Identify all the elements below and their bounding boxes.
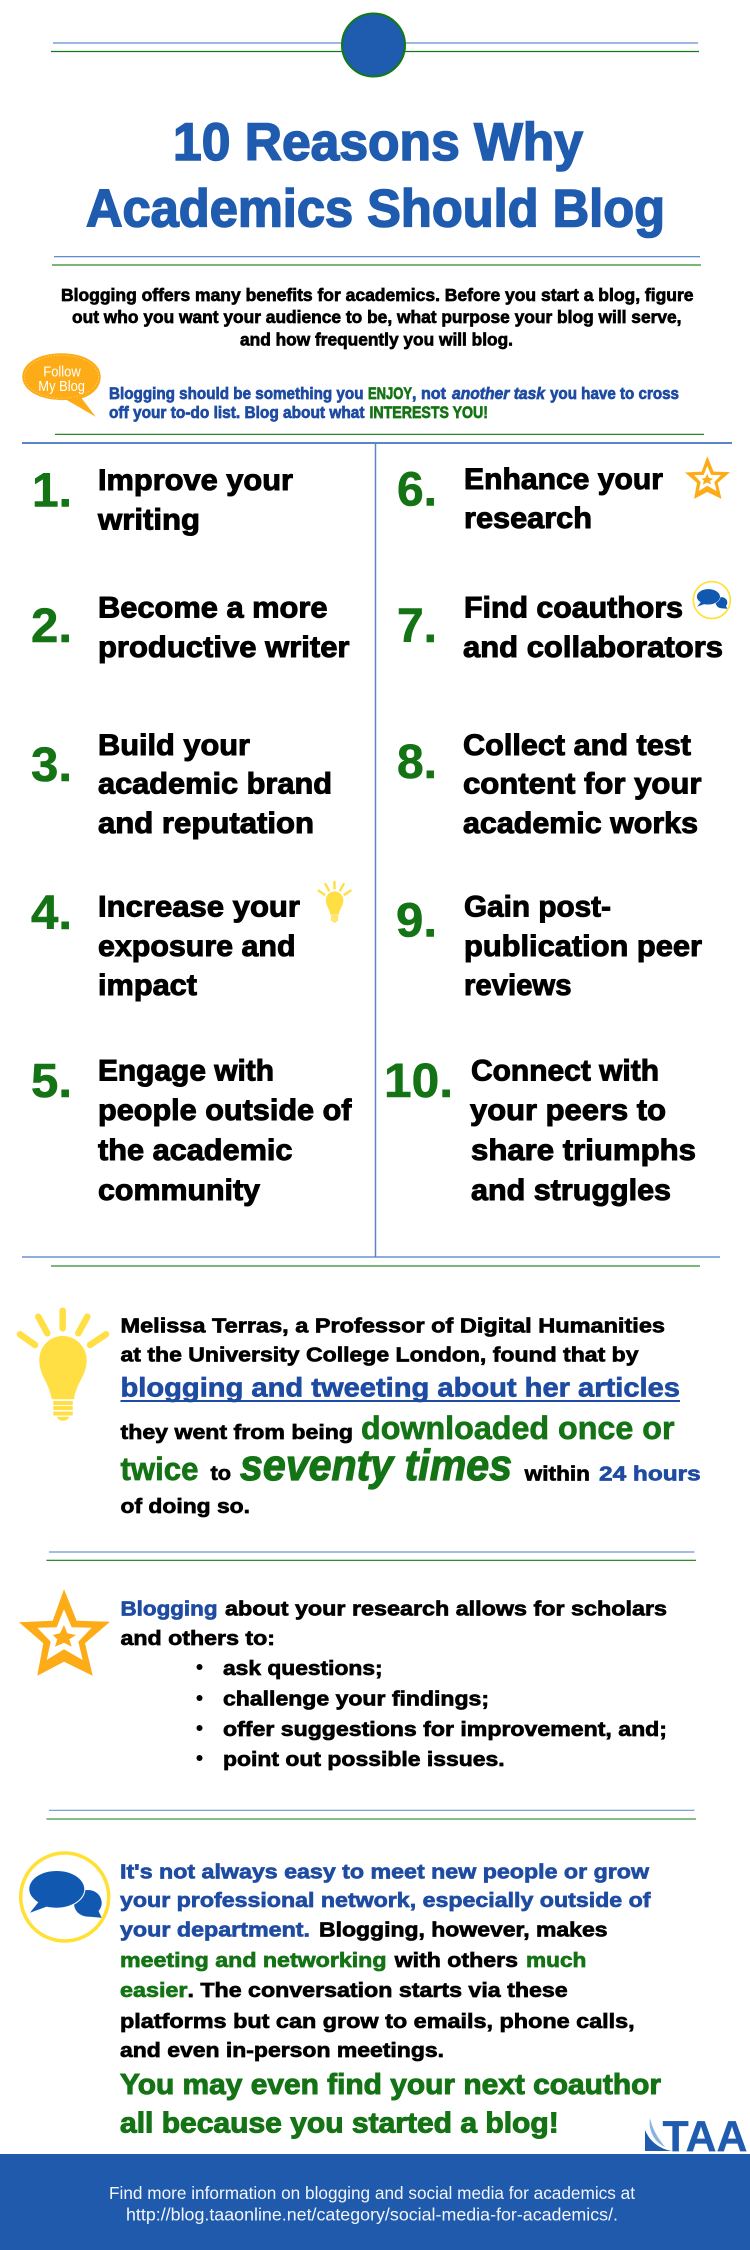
- top rule with circle ornament: [51, 14, 699, 76]
- icon: small light bulb: [319, 882, 351, 923]
- reason 5: the academic: [98, 1134, 292, 1167]
- icon: follow my blog speech bubble: My Blog: [38, 379, 85, 395]
- icon: large star: [19, 1589, 110, 1676]
- icon: small chat circle: [693, 582, 730, 619]
- reason 3: Build your: [98, 729, 250, 762]
- title: [86, 113, 665, 238]
- icon: follow my blog speech bubble: Follow: [43, 365, 81, 381]
- reason 1: 1.: [32, 465, 72, 518]
- reason 8: content for your: [463, 768, 702, 800]
- reason 1: Improve your: [98, 464, 293, 497]
- text block: blogging about research: Blogging: [120, 1598, 218, 1621]
- reason 10: share triumphs: [471, 1134, 696, 1167]
- icon: large chat circle: [21, 1853, 109, 1941]
- text block: Melissa Terras finding: to: [210, 1462, 231, 1485]
- reason 8: 8.: [397, 736, 437, 789]
- reason 9: Gain post-: [464, 891, 611, 924]
- reason 7: Find coauthors: [464, 592, 683, 625]
- reason 9: reviews: [464, 969, 572, 1002]
- callout: enjoy blogging: ENJOY: [368, 385, 412, 403]
- reason 10: and struggles: [471, 1174, 671, 1207]
- intro paragraph: out who you want your audience to be, what purpose your blog will serve,: [72, 307, 682, 327]
- text block: Melissa Terras finding: they went from being: [120, 1421, 353, 1444]
- text block: networking: your professional network, especially outside of: [120, 1889, 651, 1912]
- reason 5: community: [98, 1174, 260, 1207]
- icon: large light bulb: [20, 1311, 106, 1421]
- intro paragraph: Blogging offers many benefits for academics. Before you start a blog, figure: [61, 285, 694, 305]
- reason 6: Enhance your: [464, 463, 663, 496]
- reason 2: [31, 592, 350, 664]
- text block: networking: and even in-person meetings.: [120, 2039, 444, 2062]
- reason 5: people outside of: [98, 1094, 353, 1127]
- reason 1: writing: [97, 503, 200, 536]
- reason 4: Increase your: [98, 891, 300, 924]
- reason 4: exposure and: [98, 930, 296, 963]
- text block: networking: platforms but can grow to emails, phone calls,: [120, 2010, 635, 2033]
- intro paragraph: and how frequently you will blog.: [240, 330, 513, 350]
- reason 5: Engage with: [98, 1055, 274, 1088]
- reason 10: Connect with: [471, 1055, 659, 1088]
- reason 8: Collect and test: [463, 729, 691, 762]
- callout: enjoy blogging: [109, 385, 679, 422]
- reason 8: academic works: [463, 807, 698, 840]
- reason 4: [31, 887, 300, 1002]
- callout: enjoy blogging: off your to-do list. Blog about what: [109, 404, 365, 422]
- text block: networking: all because you started a blog!: [120, 2108, 559, 2140]
- text block: networking: It's not always easy to meet new people or grow: [120, 1860, 649, 1883]
- title: Academics Should Blog: [86, 180, 665, 238]
- reason 6: [397, 463, 663, 535]
- icon: small star: [685, 456, 730, 499]
- reason 10: 10.: [384, 1055, 453, 1108]
- text block: networking: meeting and networking: [120, 1949, 386, 1972]
- reason 4: impact: [98, 969, 197, 1002]
- callout: enjoy blogging: Blogging should be something you: [109, 385, 364, 403]
- text block: Melissa Terras finding: twice: [120, 1451, 198, 1487]
- text block: networking: easier: [120, 1979, 188, 2002]
- text block: blogging about research: about your research allows for scholars: [225, 1598, 667, 1621]
- reason 10: [384, 1055, 696, 1207]
- reason 4: 4.: [31, 887, 72, 940]
- footer band: Find more information on blogging and social media for academics at: [109, 2183, 635, 2203]
- reason 2: 2.: [31, 600, 72, 653]
- reason 6: research: [464, 502, 592, 535]
- callout: enjoy blogging: , not: [412, 385, 446, 403]
- text block: networking: You may even find your next coauthor: [120, 2069, 661, 2101]
- reason 10: your peers to: [470, 1094, 666, 1127]
- text block: blogging about research: point out possible issues.: [223, 1748, 505, 1771]
- text block: Melissa Terras finding: 24 hours: [599, 1463, 701, 1486]
- callout: enjoy blogging: you have to cross: [550, 385, 679, 403]
- text block: networking: with others: [393, 1949, 518, 1972]
- text block: blogging about research: and others to:: [120, 1627, 275, 1650]
- text block: networking: Blogging, however, makes: [319, 1919, 608, 1942]
- text block: Melissa Terras finding: at the University College London, found that by: [120, 1344, 639, 1367]
- reason 2: Become a more: [98, 592, 328, 625]
- text block: blogging about research: offer suggestions for improvement, and;: [223, 1718, 667, 1741]
- reason 5: 5.: [31, 1055, 72, 1108]
- reason 9: 9.: [396, 895, 437, 948]
- reason 7: [397, 592, 723, 664]
- reason 3: [31, 729, 332, 840]
- title: 10 Reasons Why: [173, 113, 583, 172]
- callout: enjoy blogging: INTERESTS YOU!: [370, 404, 488, 422]
- text block: Melissa Terras finding: of doing so.: [120, 1495, 250, 1518]
- footer band: http://blog.taaonline.net/category/social-media-for-academics/.: [126, 2205, 618, 2225]
- text block: blogging about research: challenge your findings;: [223, 1688, 489, 1711]
- reason 1: [32, 464, 293, 536]
- text block: Melissa Terras finding: within: [524, 1463, 590, 1486]
- icon: follow my blog speech bubble: [22, 353, 101, 417]
- reason 9: [396, 891, 702, 1002]
- text block: networking: [120, 1860, 661, 2140]
- reason 6: 6.: [397, 464, 437, 517]
- text block: blogging about research: ask questions;: [223, 1657, 383, 1680]
- text block: Melissa Terras finding: seventy times: [240, 1441, 512, 1490]
- text block: networking: your department.: [120, 1919, 310, 1942]
- reason 5: [31, 1055, 353, 1207]
- text block: Melissa Terras finding: [120, 1314, 701, 1518]
- reason 7: and collaborators: [463, 631, 723, 664]
- reason 9: publication peer: [464, 930, 702, 963]
- footer band: [0, 2154, 750, 2250]
- text block: Melissa Terras finding: Melissa Terras, a Professor of Digital Humanities: [120, 1314, 665, 1337]
- text block: Melissa Terras finding: blogging and tweeting about her articles: [120, 1373, 680, 1403]
- text block: networking: . The conversation starts via these: [188, 1979, 568, 2002]
- reason 3: 3.: [31, 739, 72, 792]
- reason 7: 7.: [397, 600, 437, 653]
- intro paragraph: [61, 285, 694, 350]
- text block: Melissa Terras finding: downloaded once or: [361, 1410, 674, 1446]
- reason 2: productive writer: [98, 631, 350, 664]
- callout: enjoy blogging: another task: [452, 385, 546, 403]
- TAA logo: TAA: [662, 2112, 748, 2161]
- reason 3: and reputation: [98, 807, 314, 840]
- reason 8: [397, 729, 702, 840]
- text block: networking: much: [526, 1949, 586, 1972]
- reason 3: academic brand: [98, 768, 332, 800]
- text block: blogging about research: [120, 1598, 667, 1771]
